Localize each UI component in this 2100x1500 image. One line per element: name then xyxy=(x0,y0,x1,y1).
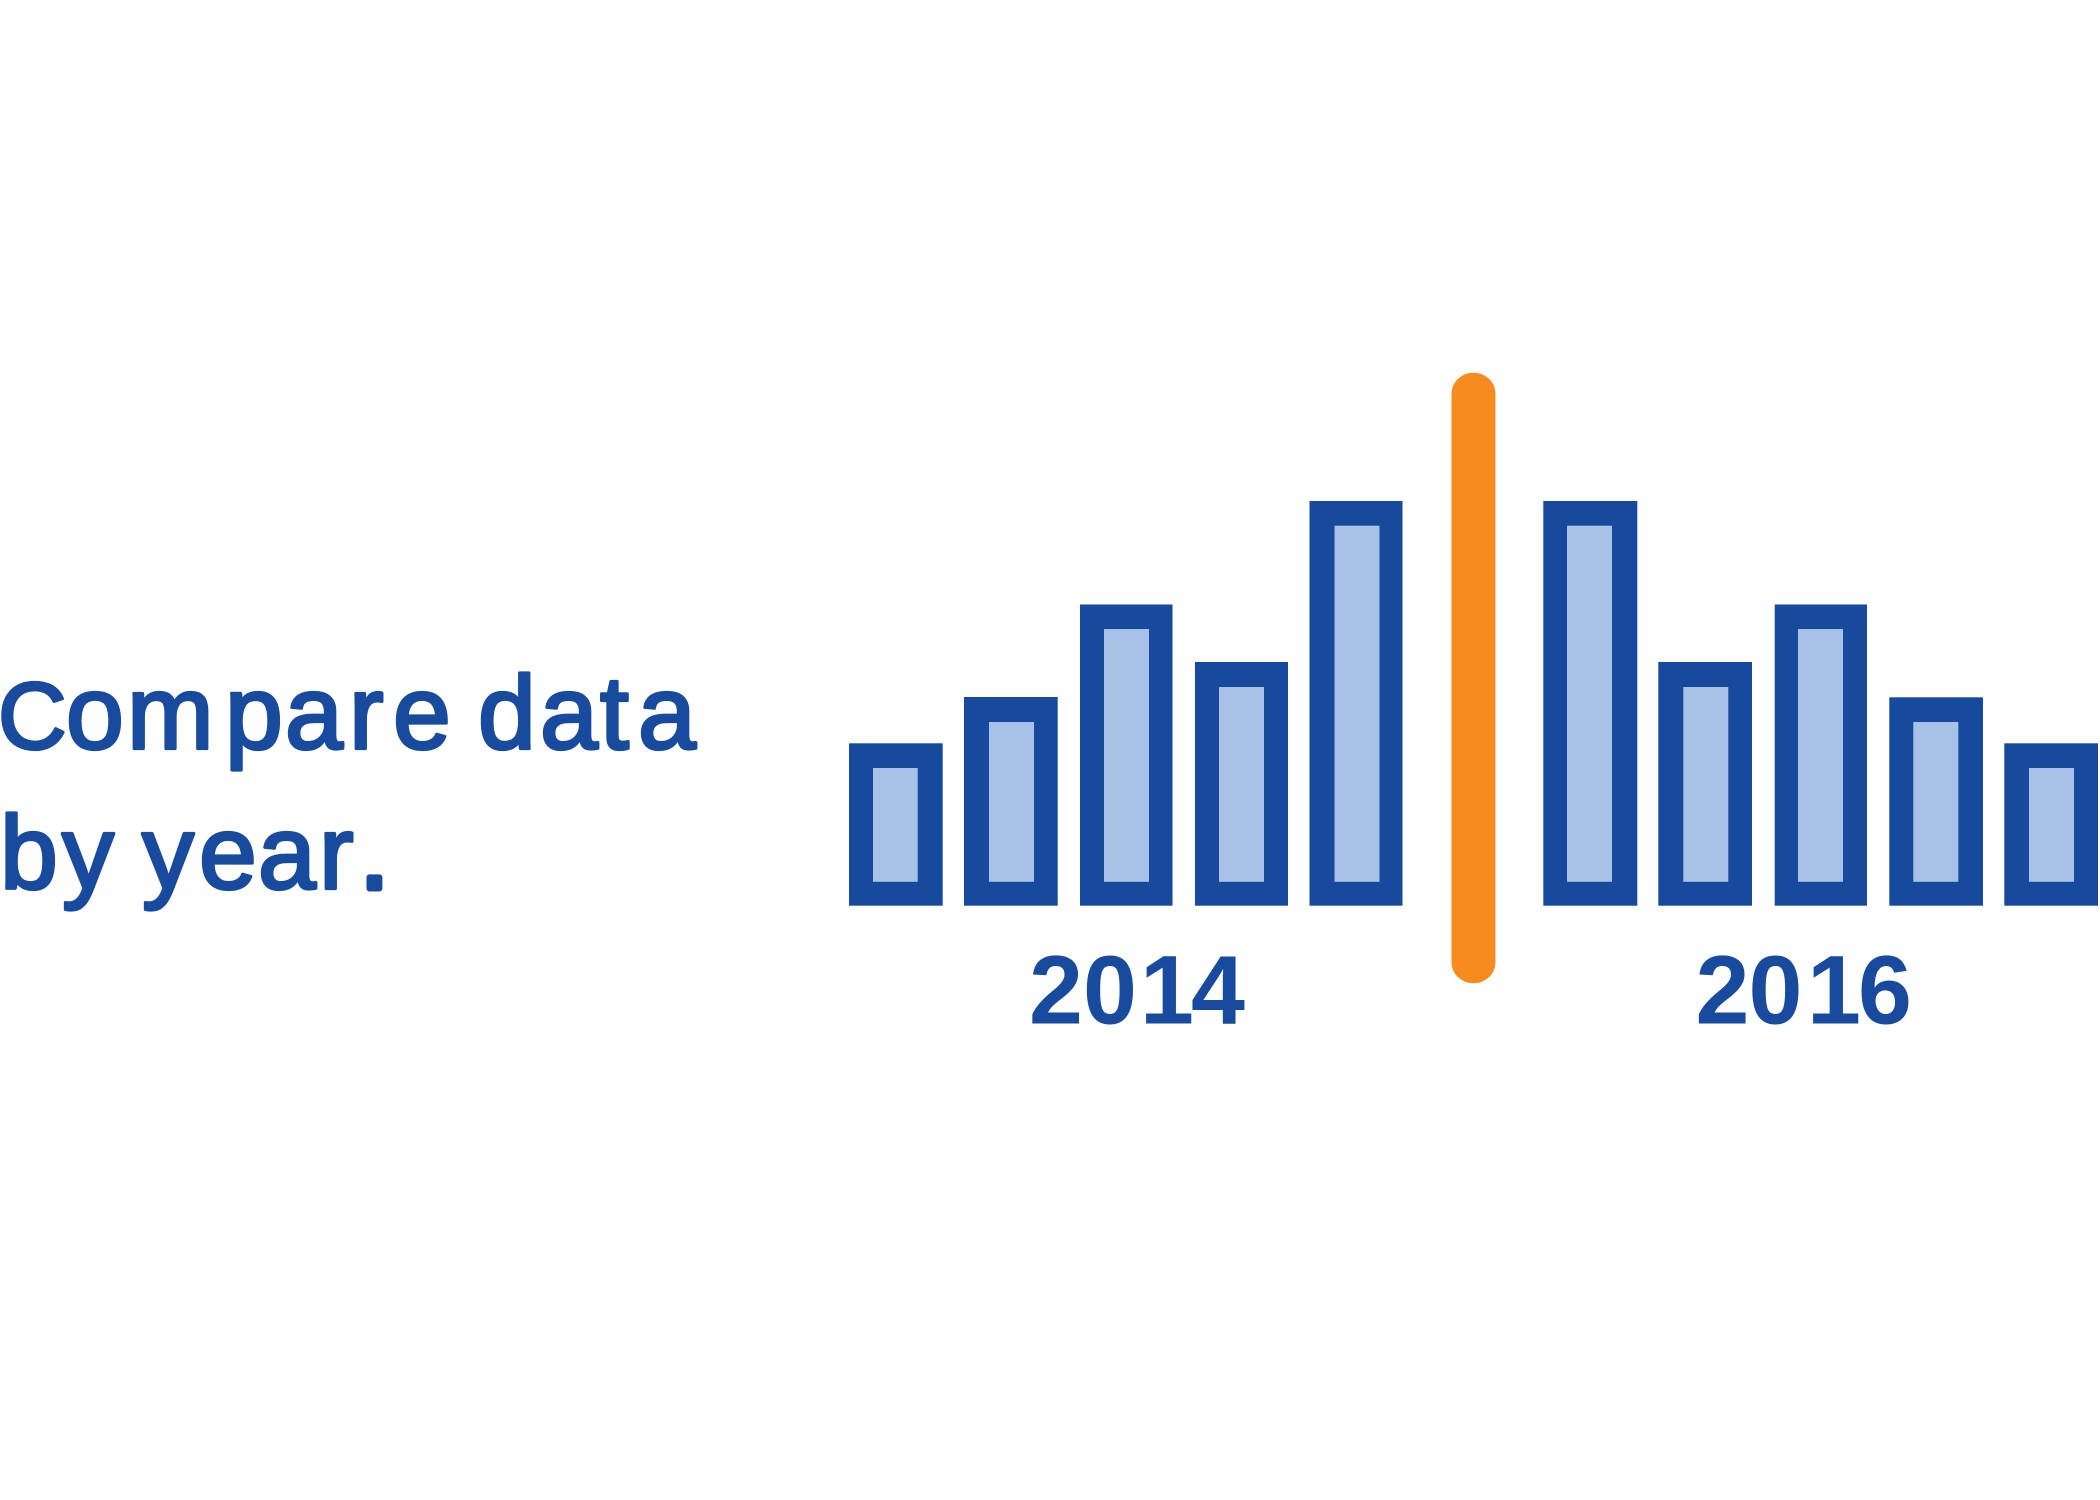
bar 9 xyxy=(1889,697,1983,906)
bar 3 xyxy=(1080,604,1172,906)
year label: 2014: 2014 xyxy=(1029,935,1245,1044)
bar 4 xyxy=(1195,662,1288,906)
orange divider bar xyxy=(1452,373,1496,983)
bar 10 xyxy=(2004,743,2098,906)
bar 2 xyxy=(964,697,1058,906)
bar 6 xyxy=(1543,501,1637,906)
heading: Compare data by year.: Compare data xyxy=(0,656,696,772)
bar 7 xyxy=(1658,662,1752,906)
heading: Compare data by year. xyxy=(0,656,696,912)
year label: 2016: 2016 xyxy=(1696,935,1912,1044)
bar 5 xyxy=(1310,501,1402,906)
bar chart: 2014 group xyxy=(849,501,1402,906)
bar chart: 2016 group xyxy=(1543,501,2098,906)
bar 8 xyxy=(1775,604,1867,906)
bar 1 xyxy=(849,743,943,906)
heading: Compare data by year.: by year. xyxy=(0,796,389,912)
